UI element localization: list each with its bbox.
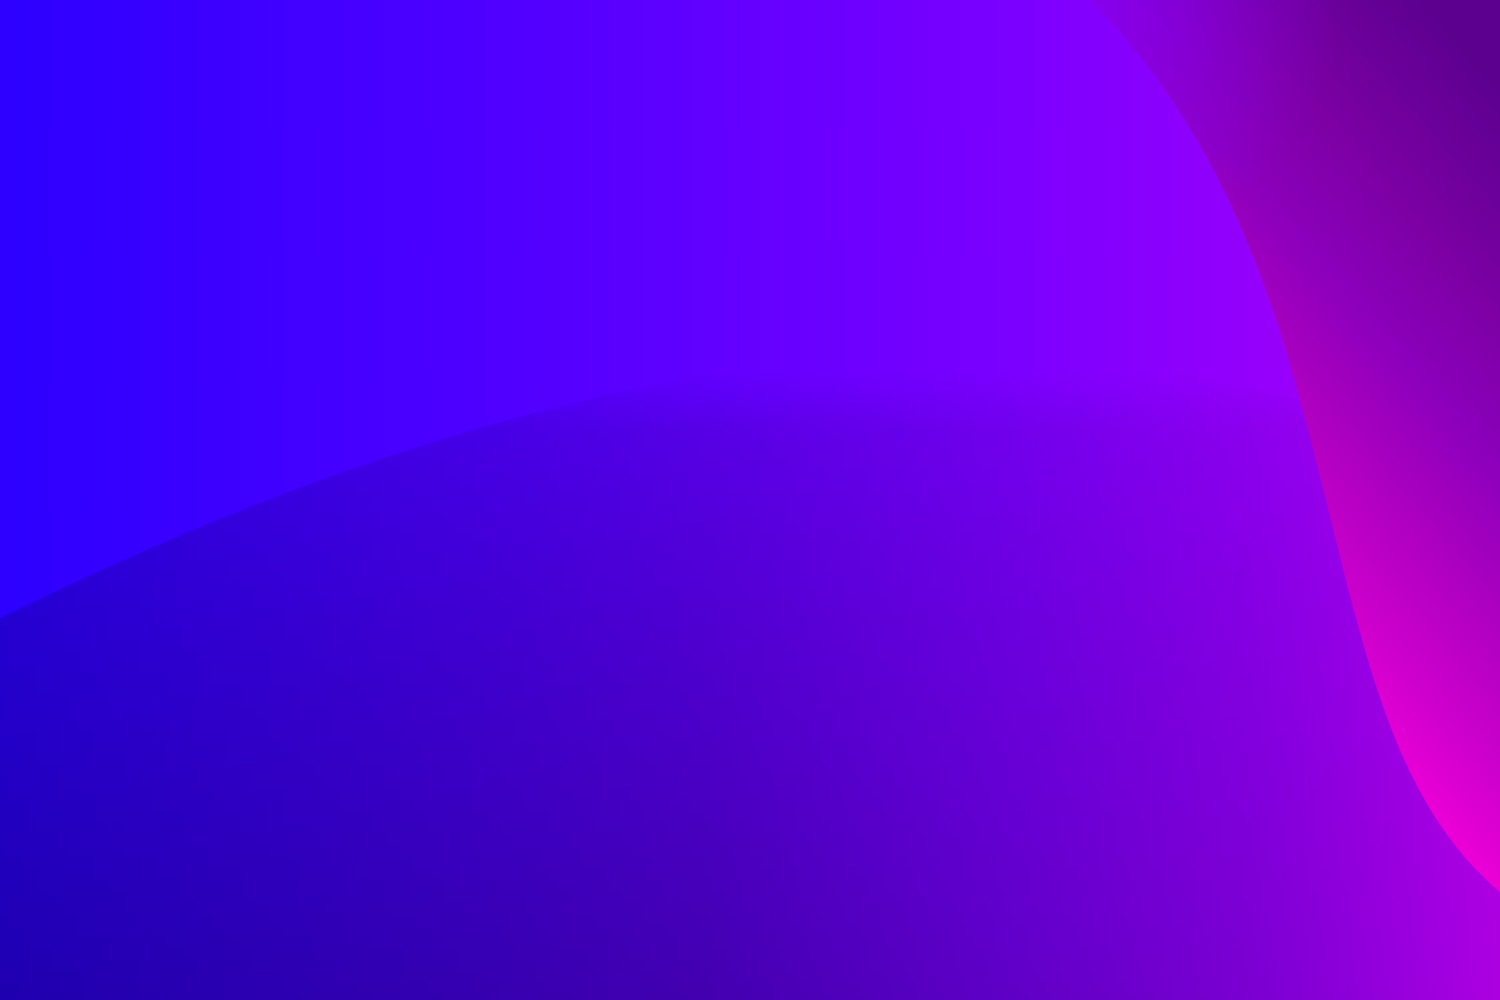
- lower dark wave: [0, 354, 1500, 1000]
- right magenta wave: [1090, 0, 1500, 892]
